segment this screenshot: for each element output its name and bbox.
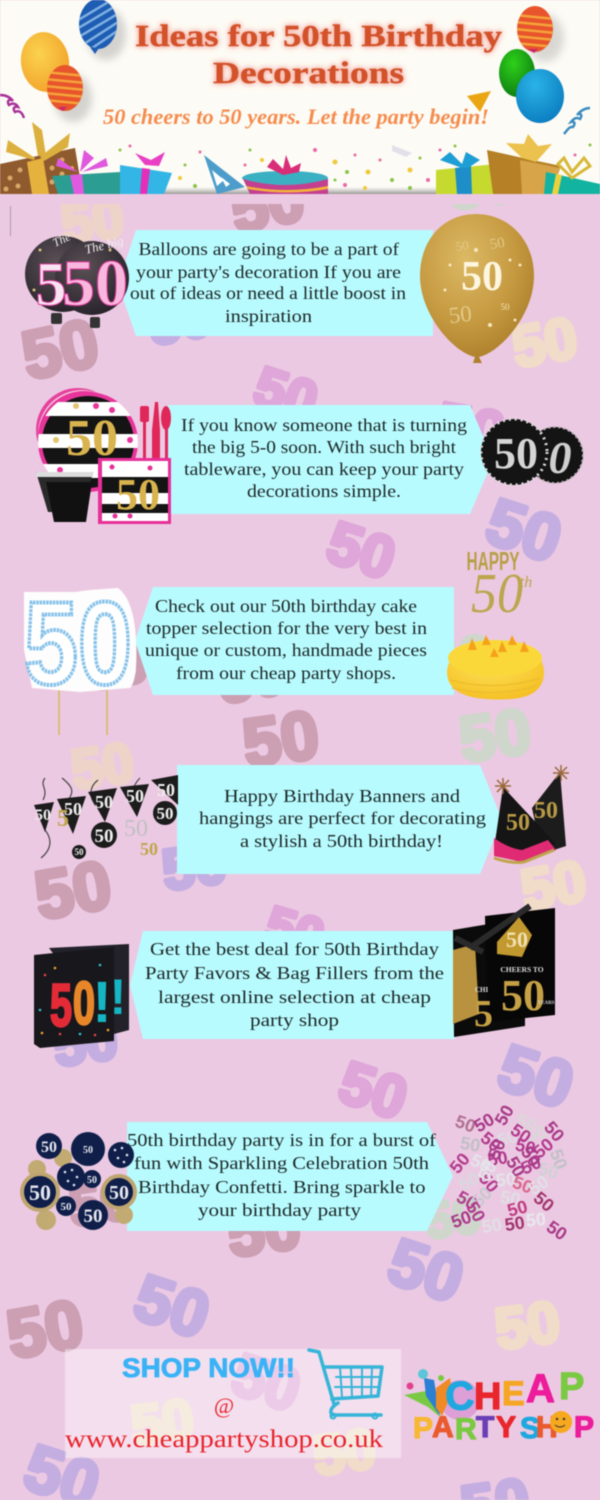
background pattern: scattered 50 numerals: 50 [15, 304, 105, 395]
icon: sparkling 50 confetti: 50 [477, 1128, 505, 1156]
panel text: If you know someone that is turning [181, 415, 467, 435]
background pattern: scattered 50 numerals: 50 [49, 1006, 122, 1079]
at sign: @ [214, 1393, 234, 1418]
icon: sparkling 50 confetti: 50 [467, 1150, 494, 1176]
panel text [127, 1130, 436, 1220]
panel text: Check out our 50th birthday cake [155, 596, 417, 616]
panel text: Balloons are going to be a part of [138, 239, 399, 259]
icon: sparkling 50 confetti: 50 [459, 1133, 482, 1156]
background pattern: scattered 50 numerals: 50 [443, 146, 521, 224]
icon: black gift bag: 0 [73, 970, 95, 1037]
panel text: fun with Sparkling Celebration 50th [134, 1153, 429, 1173]
background pattern: scattered 50 numerals: 50 [247, 354, 325, 433]
gift: brown polka box [0, 122, 80, 194]
panel text: inspiration [225, 306, 312, 326]
icon: yellow cake [447, 635, 544, 699]
panel text: your party's decoration If you are [136, 262, 401, 282]
napkins: 50 [116, 470, 160, 519]
background pattern: scattered 50 numerals: 50 [29, 846, 117, 934]
icon: shopping cart [309, 1350, 382, 1418]
confetti dots [118, 144, 592, 190]
icon: Happy 50th topper: 50 [471, 563, 523, 625]
logo figure [404, 1369, 480, 1420]
icon: sparkling 50 confetti: 50 [518, 1152, 544, 1179]
icon: pennant banner: 50 [35, 807, 51, 824]
balloon: blue [516, 69, 564, 123]
panel text: 50th birthday party is in for a burst of [127, 1130, 436, 1150]
background pattern: scattered 50 numerals: 50 [455, 695, 535, 776]
title: Decorations [213, 55, 404, 90]
icon: navy and gold table scatter: 50 [84, 1206, 102, 1227]
panel text: the big 5-0 soon. With such bright [192, 437, 456, 457]
icon: gold balloon: 50 [461, 254, 503, 300]
icon: gold and black favor bags [453, 906, 555, 1037]
cups [36, 472, 93, 522]
icon: pennant banner: 50 [126, 786, 144, 806]
icon: sparkling 50 confetti: 50 [517, 1143, 545, 1170]
logo: Cheap Party Shop: E [502, 1375, 525, 1413]
header banner [0, 0, 600, 194]
panel text [181, 415, 467, 501]
balloon: orange striped right [515, 6, 564, 62]
icon: sparkling 50 confetti [446, 1102, 571, 1244]
icon: sparkling 50 confetti: 50 [470, 1109, 498, 1136]
icon: navy and gold table scatter: 50 [41, 1139, 57, 1156]
icon: sparkling 50 confetti: 50 [524, 1121, 549, 1146]
icon: gold balloon [420, 214, 534, 363]
background pattern: scattered 50 numerals: 50 [80, 629, 153, 702]
logo: Cheap Party Shop: R [455, 1413, 477, 1446]
icon: sparkling 50 confetti: 50 [446, 1149, 474, 1177]
icon: sparkling 50 confetti: 50 [480, 1214, 503, 1237]
icon: gold and black favor bags: CHEERS TO [500, 965, 544, 974]
panel text: your birthday party [198, 1200, 361, 1220]
icon: pennant banner: 50 [156, 804, 174, 823]
icon: pennant banner: 50 [140, 839, 158, 859]
icon: gold and black favor bags: 50 [501, 971, 545, 1020]
background pattern: scattered 50 numerals: 50 [516, 848, 591, 923]
background pattern: scattered 50 numerals: 50 [126, 1260, 218, 1353]
background pattern: scattered 50 numerals: 50 [380, 1224, 472, 1317]
round gift box [242, 155, 328, 194]
logo: Cheap Party Shop: P [559, 1366, 584, 1408]
background pattern: scattered 50 numerals: 50 [67, 730, 138, 801]
icon: black sparkle foil balloons: 50 [494, 429, 538, 478]
background pattern: scattered 50 numerals: 50 [259, 896, 330, 968]
icon: sparkling 50 confetti: 50 [536, 1158, 561, 1183]
panel text: from our cheap party shops. [176, 663, 396, 683]
party hat [204, 155, 245, 194]
logo: Cheap Party Shop: P [574, 1411, 594, 1444]
icon: gold and black favor bags: YEARS [538, 1001, 555, 1006]
panel: banners [177, 765, 502, 874]
logo: Cheap Party Shop: H [536, 1411, 558, 1444]
panel text: largest online selection at cheap [158, 987, 431, 1007]
background pattern: scattered 50 numerals: 50 [507, 305, 582, 380]
logo: Cheap Party Shop: A [432, 1411, 454, 1444]
background pattern: scattered 50 numerals: 50 [238, 696, 324, 782]
icon: gold and black favor bags: 5 [474, 993, 493, 1035]
background pattern: scattered 50 numerals: 50 [478, 484, 570, 577]
background pattern: scattered 50 numerals: 50 [143, 284, 216, 357]
subtitle: 50 cheers to 50 years. Let the party begin! [103, 104, 489, 129]
icon: navy and gold table scatter: 50 [60, 1201, 72, 1213]
gift: cyan box [120, 152, 172, 194]
panel: party favors [130, 931, 455, 1039]
title [135, 18, 503, 90]
background pattern: scattered 50 numerals: 50 [222, 1187, 305, 1271]
background pattern: scattered 50 numerals: 50 [431, 390, 511, 470]
panel text: party shop [250, 1010, 339, 1030]
icon: party hats [494, 765, 569, 862]
balloon: orange striped left [45, 65, 92, 122]
icon: sparkling 50 confetti: 50 [495, 1169, 517, 1191]
icon: black sparkle foil balloons: 0 [548, 432, 572, 483]
icon: black gift bag: 5 [50, 972, 72, 1039]
background pattern: scattered 50 numerals: 50 [127, 1386, 198, 1457]
panel text: decorations simple. [247, 481, 401, 501]
logo: Cheap Party Shop: A [526, 1367, 555, 1411]
party triangle [467, 91, 491, 112]
streamer: blue [564, 108, 590, 134]
background pattern: scattered 50 numerals: 50 [1, 1285, 89, 1373]
icon: pennant banner [34, 775, 178, 859]
panel text: Happy Birthday Banners and [224, 786, 460, 806]
panel: tableware [168, 405, 493, 514]
background pattern: scattered 50 numerals: 50 [213, 639, 290, 717]
icon: sparkling 50 confetti: 50 [513, 1134, 538, 1159]
gift: teal with pink bow [52, 150, 120, 194]
background pattern: scattered 50 numerals: 50 [224, 160, 311, 247]
icon: sparkling 50 confetti: 50 [448, 1207, 474, 1232]
icon: sparkling 50 confetti: 50 [494, 1126, 520, 1151]
icon: tableware set: 50 [66, 410, 118, 467]
icon: sparkling 50 confetti: 50 [502, 1153, 529, 1180]
logo: Cheap Party Shop [404, 1366, 594, 1446]
icon: sparkling 50 confetti: 50 [484, 1137, 510, 1162]
panel text: out of ideas or need a little boost in [130, 283, 406, 303]
icon: sparkling 50 confetti: 50 [507, 1120, 535, 1147]
panel: confetti [127, 1122, 453, 1231]
cutlery [140, 402, 171, 470]
gift: blue and lime [436, 152, 496, 194]
icon: sparkling 50 confetti: 50 [510, 1172, 535, 1198]
panel text: Birthday Confetti. Bring sparkle to [138, 1177, 426, 1197]
icon: gold balloon: 50 [500, 302, 510, 312]
icon: sparkling 50 confetti: 50 [499, 1187, 522, 1210]
background pattern: scattered 50 numerals: 50 [490, 1030, 582, 1123]
icon: sparkling 50 confetti: 50 [486, 1147, 509, 1170]
icon: sparkling 50 confetti: 50 [455, 1168, 482, 1195]
panel text: Get the best deal for 50th Birthday [150, 939, 439, 959]
logo: Cheap Party Shop: S [520, 1412, 540, 1445]
icon: sparkling 50 confetti: 50 [468, 1183, 496, 1211]
icon: sparkling 50 confetti: 50 [543, 1217, 571, 1244]
streamer: purple [0, 95, 24, 118]
icon: navy and gold table scatter: 50 [109, 1182, 129, 1204]
panel text: tableware, you can keep your party [184, 459, 464, 479]
icon: navy and gold table scatter: 50 [83, 1145, 93, 1156]
icon: pennant banner: 50 [64, 799, 82, 819]
gift: gold box [487, 134, 561, 194]
background pattern: scattered 50 numerals: 50 [491, 1289, 564, 1362]
background pattern: scattered 50 numerals: 50 [158, 830, 231, 903]
icon: sparkling 50 confetti: 50 [530, 1188, 558, 1216]
icon: sparkling 50 confetti: 50 [513, 1110, 540, 1136]
icon: party hats: 50 [534, 798, 558, 824]
icon: navy and gold table scatter: 50 [87, 1175, 97, 1186]
icon: sparkling 50 confetti: 50 [505, 1196, 530, 1221]
icon: Happy 50th topper: HAPPY [466, 546, 520, 576]
icon: pennant banner: 50 [157, 780, 175, 800]
icon: sparkling 50 confetti: 50 [491, 1102, 518, 1129]
icon: tableware set [36, 388, 171, 524]
title: Ideas for 50th Birthday [135, 18, 503, 53]
logo: Cheap Party Shop: H [474, 1376, 501, 1418]
logo: Cheap Party Shop: P [413, 1412, 433, 1445]
icon: gold balloon: 50 [489, 235, 506, 253]
icon: navy and gold table scatter [22, 1132, 135, 1230]
icon: sparkling 50 confetti: 50 [525, 1171, 552, 1199]
icon: gold balloon: 50 [455, 237, 470, 254]
panel: cake topper [135, 587, 454, 695]
background pattern: scattered 50 numerals: 50 [309, 1416, 380, 1487]
balloon: green [499, 49, 535, 97]
icon: sparkling 50 confetti: 50 [540, 1117, 568, 1146]
panel text: unique or custom, handmade pieces [145, 640, 427, 660]
icon: Happy 50th topper [466, 546, 532, 625]
icon: sparkling 50 confetti: 50 [525, 1209, 547, 1231]
icon: double foil balloons [25, 229, 129, 328]
logo smiley [550, 1411, 572, 1433]
website url: www.cheappartyshop.co.uk [65, 1426, 384, 1453]
panel: balloons [118, 230, 433, 336]
icon: black gift bag: ! [110, 969, 126, 1025]
panel text [145, 939, 444, 1030]
logo: Cheap Party Shop: T [476, 1411, 494, 1444]
icon: gold and black favor bags: 50 [506, 927, 528, 952]
icon: Happy 50th topper: th [520, 574, 532, 591]
icon: pennant banner: 50 [124, 816, 148, 842]
background pattern: scattered 50 numerals: 50 [319, 508, 403, 593]
logo: Cheap Party Shop: Y [496, 1411, 516, 1444]
panel: shop now call to action [65, 1349, 401, 1458]
background pattern: scattered 50 numerals: 50 [224, 1340, 308, 1425]
background pattern: scattered 50 numerals: 50 [331, 1048, 415, 1133]
panel text: Party Favors & Bag Fillers from the [145, 963, 444, 983]
logo: Cheap Party Shop: C [444, 1374, 475, 1419]
balloon: yellow [17, 29, 73, 95]
gift: teal with yellow ribbon [544, 158, 600, 194]
icon: navy and gold table scatter: 50 [29, 1180, 51, 1205]
icon: gold and black favor bags: CHI [475, 986, 488, 994]
icon: sparkling 50 confetti: 50 [462, 1198, 489, 1225]
icon: party hats: 50 [506, 810, 530, 836]
icon: double foil balloons: 50 [62, 247, 128, 320]
icon: candle topper: 50 [24, 578, 132, 710]
icon: pennant banner: 50 [94, 826, 114, 847]
balloon: blue striped [70, 0, 126, 60]
panel text: topper selection for the very best in [146, 618, 427, 638]
icon: black sparkle foil balloons [481, 419, 583, 485]
panel text [130, 239, 406, 326]
icon: sparkling 50 confetti: 50 [529, 1134, 557, 1162]
icon: double foil balloons: The big [83, 233, 125, 257]
icon: double foil balloons: The [50, 229, 73, 250]
background pattern: scattered 50 numerals: 50 [421, 1187, 484, 1250]
icon: pennant banner: 5 [57, 806, 69, 832]
shop now heading: SHOP NOW!! [122, 1353, 295, 1383]
icon: sparkling 50 confetti: 50 [474, 1158, 501, 1185]
panel text [199, 786, 486, 851]
icon: pennant banner: 50 [95, 792, 113, 812]
icon: sparkling 50 confetti: 50 [546, 1146, 571, 1172]
background pattern: scattered 50 numerals: 50 [57, 185, 128, 256]
icon: sparkling 50 confetti: 50 [475, 1168, 503, 1196]
icon: gold balloon: 50 [447, 301, 473, 328]
icon: pennant banner: 50 [74, 847, 84, 857]
background pattern: scattered 50 numerals: 50 [65, 1167, 136, 1238]
background pattern: scattered 50 numerals: 50 [421, 622, 497, 698]
icon: double foil balloons: 5 [36, 251, 66, 319]
panel text: hangings are perfect for decorating [199, 808, 486, 828]
icon: black gift bag: ! [92, 970, 112, 1035]
icon: black gift bag [34, 944, 129, 1048]
icon: sparkling 50 confetti: 50 [453, 1111, 478, 1137]
panel text: a stylish a 50th birthday! [240, 831, 443, 851]
icon: sparkling 50 confetti: 50 [503, 1212, 526, 1235]
panel text [145, 596, 427, 683]
icon: sparkling 50 confetti: 50 [453, 1187, 480, 1214]
